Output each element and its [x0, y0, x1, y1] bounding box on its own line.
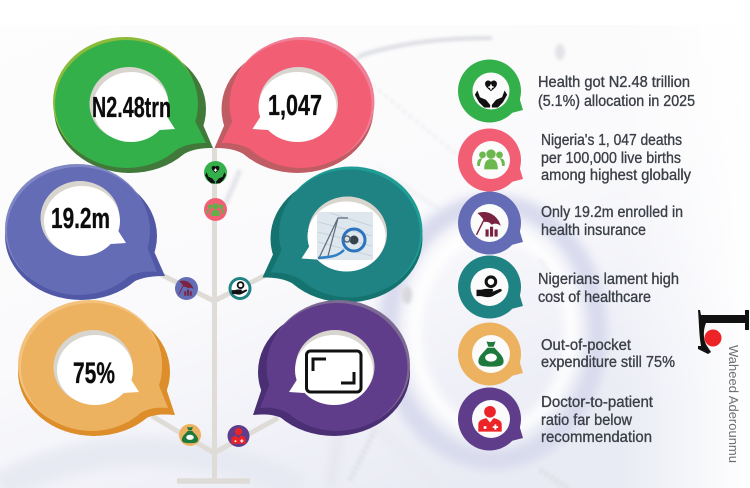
legend item: out-of-pocket — [458, 322, 675, 386]
text: cost: cost of healthcare — [538, 289, 651, 306]
bubble: green N2.48trn — [53, 37, 213, 173]
value: 75%: 75% — [73, 357, 115, 390]
stem icon: green hands — [204, 161, 227, 184]
text: insurance: Only 19.2m enrolled in — [541, 204, 683, 221]
text: deaths: Nigeria's 1, 047 deaths — [541, 132, 682, 149]
legend item: cost of healthcare — [458, 256, 679, 318]
bubble: orange 75% — [18, 300, 175, 436]
text: insurance: health insurance — [541, 222, 646, 239]
text: allocation: Health got N2.48 trillion — [538, 74, 690, 91]
legend item: health insurance — [458, 192, 683, 254]
text: doctor ratio: Doctor-to-patient — [541, 394, 654, 411]
bubble: pink 1,047 — [214, 37, 374, 173]
icon: image placeholder frame — [306, 351, 361, 392]
icon: orange bubble with money bag — [458, 322, 523, 386]
icon: green bubble with hands — [458, 60, 523, 122]
value: 19.2m: 19.2m — [51, 203, 110, 235]
publisher logo — [698, 310, 749, 354]
icon: pink bubble with people — [458, 128, 523, 192]
bubble: blue 19.2m — [5, 164, 165, 300]
bubble: teal with stethoscope photo — [262, 166, 422, 302]
designer credit: Waheed Aderounmu — [726, 345, 740, 463]
text: deaths: among highest globally — [541, 167, 691, 184]
text: doctor ratio: ratio far below — [541, 412, 633, 429]
text: out-of-pocket: Out-of-pocket — [541, 337, 632, 354]
text: allocation: (5.1%) allocation in 2025 — [538, 93, 695, 110]
icon: purple bubble with doctor — [458, 388, 523, 450]
stem icon: pink people — [204, 198, 227, 221]
bubble: purple image placeholder — [253, 300, 410, 436]
legend item: doctor ratio — [458, 388, 654, 450]
icon: blue bubble with umbrella — [458, 192, 523, 254]
stem icon: blue umbrella — [175, 277, 198, 300]
legend item: maternal deaths — [458, 128, 691, 192]
text: deaths: per 100,000 live births — [541, 150, 681, 167]
photo: stethoscope on chart — [317, 212, 373, 260]
text: doctor ratio: recommendation — [541, 429, 652, 446]
text: cost: Nigerians lament high — [538, 271, 679, 288]
stem icon: teal coin hand — [228, 277, 252, 300]
tree: trunk and branches — [152, 148, 278, 481]
value: 1,047: 1,047 — [268, 90, 322, 122]
stem icon: orange money bag — [179, 424, 201, 446]
text: out-of-pocket: expenditure still 75% — [541, 354, 675, 371]
legend item: health allocation — [458, 60, 695, 122]
value: N2.48trn: N2.48trn — [92, 92, 171, 124]
stem icon: purple doctor — [228, 425, 250, 447]
icon: teal bubble with coin hand — [458, 256, 523, 318]
